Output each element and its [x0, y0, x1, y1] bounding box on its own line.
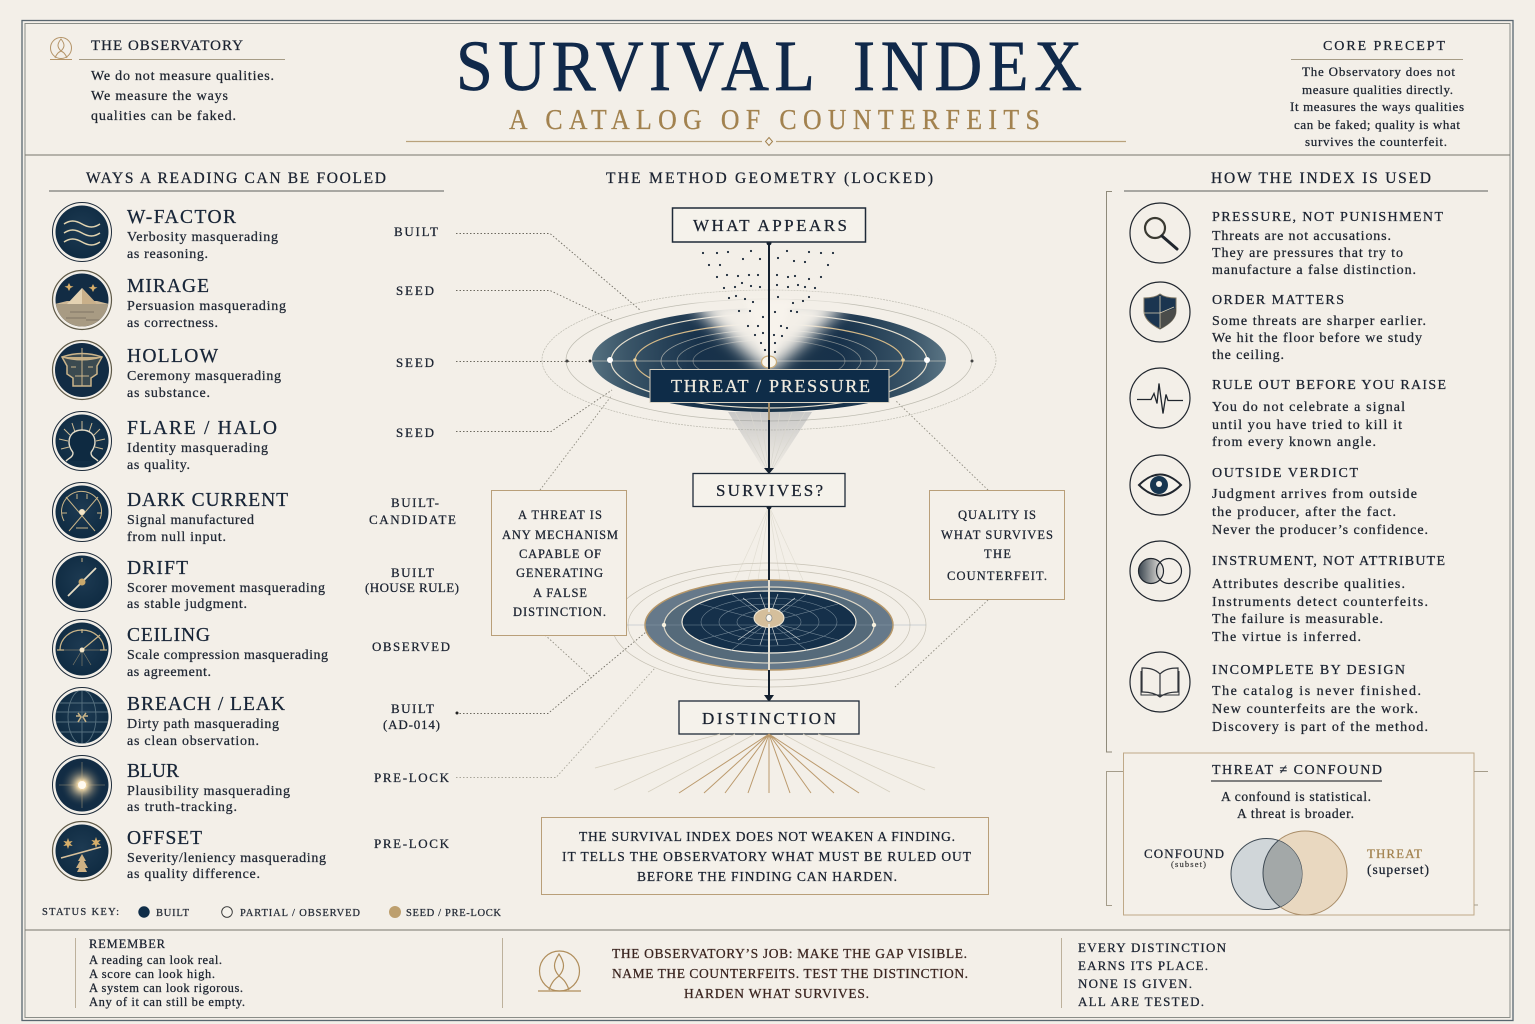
item: rule out before you raise: from every known angle.: [1212, 435, 1376, 450]
diagram: lower distinction disc: [612, 563, 926, 687]
icon: open book: [1130, 652, 1190, 712]
row: Flare / Halo: FLARE / HALO: [127, 418, 277, 439]
callout: threat definition: GENERATING: [516, 566, 603, 580]
icon: ceiling gauge: [52, 620, 112, 678]
row: Offset: [52, 822, 450, 882]
row: Offset: as quality difference.: [127, 867, 260, 882]
footer: every distinction: EVERY DISTINCTION: [1078, 940, 1227, 955]
footer: remember: [76, 937, 245, 1009]
icon: observatory mark: [538, 951, 581, 991]
statement: [91, 69, 274, 124]
callout: quality definition: [930, 490, 1064, 600]
callout: survival index statement: IT TELLS THE OBSERVATORY WHAT MUST BE RULED OUT: [562, 849, 972, 864]
row: Ceiling: [52, 620, 450, 680]
title: INDEX: [853, 25, 1082, 106]
row: Breach / Leak: as clean observation.: [127, 734, 259, 749]
item: instrument, not attribute: Instruments detect counterfeits.: [1212, 595, 1428, 610]
icon: halo silhouette: [52, 412, 112, 470]
row: Mirage: SEED: [396, 283, 434, 298]
flow arrows: [764, 240, 774, 702]
heading: THE OBSERVATORY: [91, 38, 243, 54]
box: survives: [693, 474, 845, 506]
panel: threat vs confound: [1106, 753, 1488, 915]
row: Dark Current: CANDIDATE: [369, 512, 456, 527]
row: Drift: (HOUSE RULE): [365, 580, 459, 595]
icon: tilted balance: [52, 822, 112, 880]
footer: every distinction: EARNS ITS PLACE.: [1078, 958, 1208, 973]
item: instrument, not attribute: INSTRUMENT, NOT ATTRIBUTE: [1212, 554, 1445, 569]
icon: hollow vessel: [52, 340, 112, 400]
item: rule out before you raise: [1130, 368, 1446, 450]
item: outside verdict: Never the producer’s confidence.: [1212, 523, 1428, 538]
core precept: [1290, 39, 1464, 149]
row: Flare / Halo: [52, 412, 434, 473]
footer: remember: A system can look rigorous.: [89, 981, 243, 995]
footer: remember: A reading can look real.: [89, 953, 222, 967]
row: Dark Current: Signal manufactured: [127, 513, 254, 528]
icon: blurred star: [52, 756, 112, 814]
callout: threat definition: ANY MECHANISM: [502, 528, 618, 542]
icon: eye: [1130, 455, 1190, 515]
precept text: It measures the ways qualities: [1290, 99, 1464, 114]
center heading: THE METHOD GEOMETRY (LOCKED): [606, 170, 933, 187]
panel: threat vs confound: (superset): [1367, 862, 1429, 877]
icon: breached grid: [52, 688, 112, 746]
callout: threat definition: DISTINCTION.: [513, 605, 606, 619]
title: SURVIVAL: [456, 25, 815, 106]
central fade: [690, 294, 848, 374]
item: pressure, not punishment: PRESSURE, NOT PUNISHMENT: [1212, 210, 1443, 225]
row: Blur: as truth-tracking.: [127, 800, 237, 815]
statement: We do not measure qualities.: [91, 69, 274, 84]
row: Breach / Leak: BREACH / LEAK: [127, 694, 285, 715]
callout: survival index statement: THE SURVIVAL INDEX DOES NOT WEAKEN A FINDING.: [579, 829, 955, 844]
footer: every distinction: [1078, 940, 1227, 1009]
precept text: The Observatory does not: [1302, 64, 1455, 79]
callout: survival index statement: BEFORE THE FINDING CAN HARDEN.: [637, 869, 897, 884]
row: Blur: BLUR: [127, 761, 179, 782]
panel: threat vs confound: (subset): [1171, 859, 1206, 869]
panel: how the index is used: [1106, 170, 1488, 752]
distinction rays: [595, 734, 935, 793]
disc rings: [592, 314, 946, 408]
row: Drift: BUILT: [391, 565, 434, 580]
item: order matters: the ceiling.: [1212, 348, 1284, 363]
precept text: [1290, 64, 1464, 149]
item: pressure, not punishment: They are pressures that try to: [1212, 246, 1403, 261]
header: the observatory: [50, 38, 285, 124]
precept text: survives the counterfeit.: [1305, 134, 1447, 149]
item: instrument, not attribute: The virtue is inferred.: [1212, 630, 1361, 645]
box: distinction: [679, 701, 859, 734]
footer: observatory's job: HARDEN WHAT SURVIVES.: [684, 986, 869, 1001]
row: Hollow: SEED: [396, 355, 434, 370]
row: Breach / Leak: (AD-014): [383, 717, 440, 732]
item: rule out before you raise: until you have tried to kill it: [1212, 418, 1402, 433]
heading: CORE PRECEPT: [1323, 39, 1445, 54]
venn diagram: [1231, 831, 1347, 915]
footer: observatory's job: THE OBSERVATORY’S JOB: MAKE THE GAP VISIBLE.: [612, 946, 967, 961]
diagram: upper threat disc: [542, 290, 996, 430]
row: Blur: PRE-LOCK: [374, 770, 450, 785]
status key legend: PARTIAL / OBSERVED: [240, 908, 360, 919]
item: outside verdict: the producer, after the fact.: [1212, 505, 1396, 520]
row: Mirage: [52, 270, 434, 331]
row: Flare / Halo: SEED: [396, 425, 434, 440]
statement: qualities can be faked.: [91, 109, 236, 124]
row: Offset: Severity/leniency masquerading: [127, 851, 326, 866]
row: Mirage: MIRAGE: [127, 276, 209, 297]
item: incomplete by design: INCOMPLETE BY DESIGN: [1212, 663, 1405, 678]
callout: threat definition: A FALSE: [533, 586, 587, 600]
panel: threat vs confound: THREAT: [1367, 846, 1422, 861]
outer rings: [542, 290, 996, 430]
title: [456, 25, 1082, 106]
row: Flare / Halo: Identity masquerading: [127, 441, 268, 456]
row: Dark Current: DARK CURRENT: [127, 490, 288, 511]
row: Hollow: Ceremony masquerading: [127, 369, 281, 384]
item: incomplete by design: New counterfeits are the work.: [1212, 702, 1418, 717]
status key legend: BUILT: [156, 908, 190, 919]
row: Mirage: Persuasion masquerading: [127, 299, 286, 314]
row: W-Factor: Verbosity masquerading: [127, 230, 278, 245]
row: W-Factor: [52, 202, 438, 262]
row: Drift: [52, 552, 459, 612]
row: Blur: Plausibility masquerading: [127, 784, 290, 799]
lower fan: [728, 412, 812, 580]
item: incomplete by design: [1130, 652, 1428, 735]
row: Mirage: as correctness.: [127, 316, 218, 331]
item: instrument, not attribute: Attributes describe qualities.: [1212, 577, 1405, 592]
row: Ceiling: CEILING: [127, 625, 210, 646]
outer rings: [612, 563, 926, 687]
row: Flare / Halo: as quality.: [127, 458, 190, 473]
row: Breach / Leak: Dirty path masquerading: [127, 717, 279, 732]
right heading: HOW THE INDEX IS USED: [1211, 170, 1431, 187]
box: survives: SURVIVES?: [716, 481, 823, 500]
row: Hollow: [52, 340, 434, 401]
row: Dark Current: from null input.: [127, 530, 226, 545]
item: rule out before you raise: RULE OUT BEFORE YOU RAISE: [1212, 378, 1446, 393]
panel: threat vs confound: A threat is broader.: [1237, 806, 1354, 821]
row: Drift: as stable judgment.: [127, 597, 247, 612]
row: Ceiling: OBSERVED: [372, 639, 450, 654]
status key legend: [42, 906, 501, 919]
status key legend: STATUS KEY:: [42, 907, 119, 918]
footer: every distinction: ALL ARE TESTED.: [1078, 994, 1204, 1009]
status key legend: SEED / PRE-LOCK: [406, 908, 501, 919]
item: instrument, not attribute: [1130, 541, 1445, 645]
explanation: A confound is statistical.: [1221, 789, 1371, 804]
row: Ceiling: Scale compression masquerading: [127, 648, 328, 663]
row: Blur: [52, 756, 450, 815]
box: distinction: DISTINCTION: [702, 709, 836, 728]
heading: THREAT ≠ CONFOUND: [1212, 763, 1382, 778]
item: pressure, not punishment: [1130, 203, 1443, 278]
row: Dark Current: [52, 482, 456, 545]
callout: quality definition: THE: [984, 547, 1011, 561]
icon: shield: [1130, 282, 1190, 342]
item: outside verdict: [1130, 455, 1428, 538]
venn labels: CONFOUND: [1144, 846, 1224, 861]
ring nodes: [566, 357, 974, 363]
callout: quality definition: QUALITY IS: [958, 508, 1036, 522]
item: outside verdict: Judgment arrives from outside: [1212, 487, 1417, 502]
row: Drift: DRIFT: [127, 558, 188, 579]
particle cone: [703, 251, 833, 352]
footer: every distinction: NONE IS GIVEN.: [1078, 976, 1192, 991]
item: order matters: [1130, 282, 1426, 363]
statement: We measure the ways: [91, 89, 228, 104]
item: incomplete by design: The catalog is never finished.: [1212, 684, 1421, 699]
row: W-Factor: BUILT: [394, 224, 438, 239]
item: instrument, not attribute: The failure is measurable.: [1212, 612, 1383, 627]
callout: survival index statement: [542, 818, 988, 894]
icon: waves: [52, 202, 112, 262]
row: Dark Current: BUILT-: [391, 495, 439, 510]
box: what appears: [672, 208, 866, 242]
callout: threat definition: [492, 490, 626, 636]
item: pressure, not punishment: manufacture a false distinction.: [1212, 263, 1416, 278]
item: outside verdict: OUTSIDE VERDICT: [1212, 466, 1358, 481]
footer: observatory's job: [502, 938, 1062, 1008]
row: Drift: Scorer movement masquerading: [127, 581, 325, 596]
row: Offset: PRE-LOCK: [374, 836, 450, 851]
icon: overlapping lenses: [1130, 541, 1190, 601]
item: order matters: Some threats are sharper earlier.: [1212, 314, 1426, 329]
panel: ways a reading can be fooled: [49, 170, 459, 882]
item: incomplete by design: Discovery is part of the method.: [1212, 720, 1428, 735]
icon: null gauge: [52, 482, 112, 542]
row: W-Factor: W-FACTOR: [127, 207, 236, 228]
row: Breach / Leak: [52, 688, 440, 749]
icon: pyramid mirage: [52, 270, 112, 330]
item: order matters: ORDER MATTERS: [1212, 293, 1344, 308]
row: Hollow: HOLLOW: [127, 346, 219, 367]
row: Breach / Leak: BUILT: [391, 701, 434, 716]
row: Offset: OFFSET: [127, 828, 202, 849]
footer: remember: Any of it can still be empty.: [89, 995, 245, 1009]
box: what appears: WHAT APPEARS: [693, 216, 847, 235]
icon: observatory mark: [50, 38, 72, 60]
precept text: can be faked; quality is what: [1294, 117, 1460, 132]
title rule with diamond: [406, 138, 1126, 146]
leader lines: [456, 234, 988, 778]
box: threat / pressure: [650, 370, 889, 402]
row: Hollow: as substance.: [127, 386, 210, 401]
precept text: measure qualities directly.: [1302, 82, 1453, 97]
item: rule out before you raise: You do not celebrate a signal: [1212, 400, 1405, 415]
subtitle: A CATALOG OF COUNTERFEITS: [509, 104, 1040, 135]
row: W-Factor: as reasoning.: [127, 247, 208, 262]
item: pressure, not punishment: Threats are not accusations.: [1212, 229, 1391, 244]
footer: observatory's job: NAME THE COUNTERFEITS. TEST THE DISTINCTION.: [612, 966, 968, 981]
callout: quality definition: WHAT SURVIVES: [941, 528, 1053, 542]
icon: signal pulse: [1130, 368, 1190, 428]
callout: quality definition: COUNTERFEIT.: [947, 569, 1047, 583]
footer: remember: REMEMBER: [89, 937, 166, 951]
footer: remember: A score can look high.: [89, 967, 215, 981]
callout: threat definition: CAPABLE OF: [519, 547, 601, 561]
left heading: WAYS A READING CAN BE FOOLED: [86, 170, 386, 187]
callout: threat definition: A THREAT IS: [518, 508, 602, 522]
item: order matters: We hit the floor before we study: [1212, 331, 1422, 346]
disc grid: [612, 593, 926, 651]
box: threat / pressure: THREAT / PRESSURE: [671, 376, 870, 396]
icon: drifting needle: [52, 552, 112, 612]
icon: magnifier: [1130, 203, 1190, 263]
row: Ceiling: as agreement.: [127, 665, 211, 680]
